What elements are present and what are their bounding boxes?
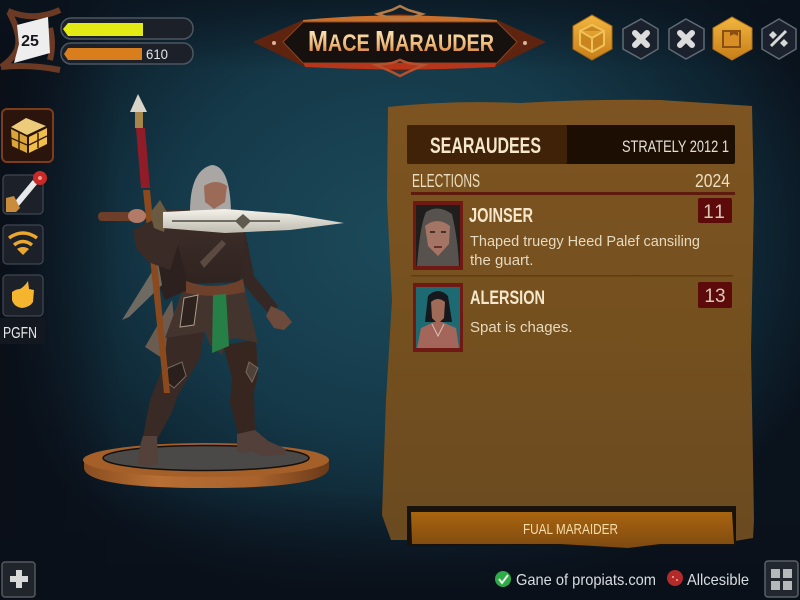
score badge	[698, 198, 732, 223]
score badge: 11	[703, 202, 727, 223]
energy bar: 610	[146, 46, 168, 62]
left leg	[143, 332, 204, 438]
icon: gold cube hexagon	[573, 15, 612, 60]
title banner: MACE MARAUDER	[308, 26, 494, 58]
score badge	[698, 282, 732, 308]
sword	[98, 200, 344, 233]
torso	[165, 210, 245, 284]
entry: Alersion	[413, 282, 732, 352]
right knee guard	[246, 362, 258, 382]
buckle plate	[180, 295, 198, 327]
chest strap	[200, 240, 226, 268]
panel header: STRATELY 2012 1	[622, 137, 729, 156]
section label	[411, 171, 735, 195]
left knee guard	[164, 362, 186, 388]
portrait: Joinser	[413, 201, 463, 270]
entry: Joinser: the guart.	[470, 252, 533, 269]
player level badge	[1, 10, 60, 70]
belt	[186, 279, 245, 296]
entry: Joinser: JOINSER	[469, 205, 533, 227]
status: game of propiats: Gane of propiats.com	[516, 572, 656, 589]
entry: Joinser: Thaped truegy Heed Palef cansiling	[470, 233, 700, 250]
right boot	[237, 430, 286, 456]
action button: FUAL MARAIDER	[523, 521, 618, 538]
hand	[266, 306, 292, 330]
entry: Alersion: Spat is chages.	[470, 319, 573, 336]
gripping hand	[128, 209, 146, 223]
grid button	[765, 561, 798, 597]
left boot	[138, 436, 158, 466]
status: allcesible	[667, 570, 749, 589]
score badge: 13	[704, 286, 726, 307]
icon: close hexagon one	[623, 19, 658, 59]
sidebar button: cube	[2, 109, 53, 162]
action button	[407, 506, 736, 548]
sidebar label	[0, 318, 45, 344]
panel header	[407, 125, 735, 164]
section label: 2024	[695, 171, 730, 191]
face	[204, 182, 227, 209]
sidebar button: sword with notification	[3, 171, 47, 214]
player level badge: 25	[21, 33, 39, 50]
hair	[190, 165, 231, 212]
section label: ELECTIONS	[412, 171, 480, 191]
sidebar label: PGFN	[3, 325, 37, 342]
character on pedestal	[83, 94, 344, 488]
icon: close hexagon two	[669, 19, 704, 59]
green sash	[212, 294, 229, 353]
rear arm	[232, 225, 278, 315]
title banner	[253, 6, 546, 76]
icon: percent hexagon	[762, 19, 796, 59]
parchment panel	[382, 100, 754, 541]
spear head	[130, 94, 147, 112]
add button	[2, 562, 35, 597]
sidebar button: thumbs up	[3, 275, 43, 316]
entry: Alersion: ALERSION	[470, 288, 545, 309]
energy bar	[61, 43, 193, 64]
spear shaft	[143, 190, 170, 393]
portrait: Alersion	[413, 283, 463, 352]
panel header: SEARAUDEES	[430, 133, 541, 158]
front arm	[133, 214, 184, 270]
health bar	[61, 18, 193, 39]
pedestal	[83, 443, 329, 488]
cape	[122, 225, 192, 358]
right leg	[223, 340, 258, 434]
spear grip	[136, 128, 150, 188]
entry: Joinser	[413, 198, 732, 270]
icon: gold document hexagon	[713, 17, 752, 60]
sidebar button: wifi	[3, 225, 43, 264]
status: allcesible: Allcesible	[687, 572, 749, 589]
skirt	[165, 290, 258, 355]
spear collar	[135, 112, 143, 128]
